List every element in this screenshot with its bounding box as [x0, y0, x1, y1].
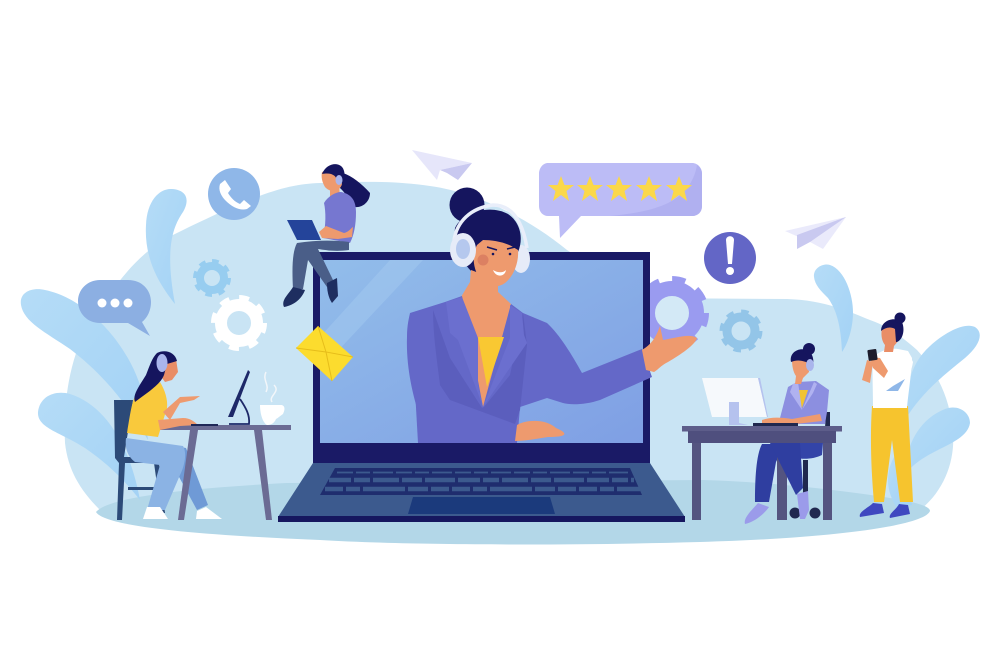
standing head [881, 327, 900, 352]
agent raised hand [642, 326, 697, 372]
agent jacket right [780, 381, 829, 424]
leaf: upper right [905, 326, 980, 420]
left headphones [156, 354, 168, 372]
laptop lid [313, 252, 650, 464]
agent pants [755, 444, 785, 502]
envelope [296, 326, 353, 381]
left keyboard [191, 424, 218, 426]
icon: blue gear right [722, 312, 760, 350]
chat bubble [78, 280, 151, 336]
star 5 [666, 176, 692, 201]
left arms [158, 396, 200, 430]
agent hair back [455, 210, 521, 275]
woman at right desk [682, 343, 842, 524]
laptop [278, 252, 685, 522]
standing left arm [862, 360, 873, 383]
leaf: lower left [38, 393, 140, 500]
standing shoes [860, 503, 910, 518]
left leaves [21, 189, 187, 500]
phone [867, 349, 878, 361]
left hair [134, 351, 177, 402]
left shirt [127, 382, 167, 437]
left far leg [170, 445, 208, 510]
agent headset band [454, 205, 527, 248]
desk [682, 426, 842, 520]
agent face [474, 240, 518, 286]
agent on screen [407, 188, 697, 443]
agent shoes right [745, 491, 809, 524]
agent left headphone cup [450, 233, 476, 267]
sitter top [323, 192, 356, 243]
left face [160, 359, 178, 382]
icon: white gear [214, 298, 264, 348]
monitor [702, 378, 768, 425]
leaf: top right [814, 265, 853, 352]
woman at left desk [114, 351, 291, 520]
leaf: behind legs [888, 452, 912, 508]
agent head [792, 360, 810, 384]
coffee cup [260, 372, 284, 425]
laptop screen [320, 260, 643, 443]
agent lapels [446, 297, 527, 407]
icon: phone [208, 168, 260, 220]
agent blouse [797, 390, 808, 408]
standing woman with phone [860, 312, 913, 518]
standing hair [881, 312, 906, 342]
paper plane: top [412, 150, 472, 180]
star rating bubble [539, 163, 702, 238]
left monitor [228, 370, 250, 424]
star 1 [548, 176, 574, 201]
woman on laptop lid [283, 164, 370, 307]
agent smile and eyes [487, 247, 515, 276]
agent hair right [791, 343, 815, 368]
agent neck and chest [461, 270, 511, 410]
sitter hair [322, 164, 345, 184]
background blob [65, 182, 953, 510]
keyboard [753, 423, 798, 426]
sitter hair tail [340, 173, 370, 207]
sitter shoes [283, 278, 338, 307]
sitter headphones [336, 175, 342, 185]
standing right sleeve [885, 352, 913, 388]
icon: exclamation [704, 232, 756, 284]
laptop base [278, 463, 685, 517]
sitter head [322, 171, 342, 191]
standing pants [871, 406, 913, 502]
agent front shin [770, 443, 803, 495]
icon: purple gear [639, 280, 705, 346]
agent hair bun [450, 188, 484, 222]
icon: blue gear left [196, 262, 228, 294]
agent resting hand [515, 421, 564, 441]
star 3 [606, 176, 632, 201]
ground shadow [96, 480, 930, 544]
agent jacket [407, 296, 652, 443]
agent right headphone cup [512, 245, 530, 273]
agent lower sleeve [415, 390, 517, 443]
left chair [114, 400, 165, 520]
paper plane: right [785, 217, 846, 249]
leaf: lower right [905, 407, 970, 475]
left shoes [143, 507, 222, 519]
agent shirt [478, 337, 504, 387]
left pants [126, 438, 185, 510]
sitter laptop [287, 220, 321, 240]
sitter neck [330, 185, 340, 197]
standing hands [870, 357, 888, 378]
agent headset right [806, 359, 814, 371]
sitter legs [292, 241, 349, 289]
star 4 [636, 176, 662, 201]
agent forearm [762, 414, 822, 424]
agent chair [787, 412, 830, 518]
leaf: large left [21, 289, 148, 440]
sitter hands [319, 226, 353, 239]
star 2 [577, 176, 603, 201]
left desk [160, 425, 291, 520]
touchpad [408, 497, 555, 514]
standing shirt [873, 349, 912, 408]
leaf: top left [146, 189, 187, 304]
keyboard [320, 468, 642, 495]
right leaves [814, 265, 980, 508]
